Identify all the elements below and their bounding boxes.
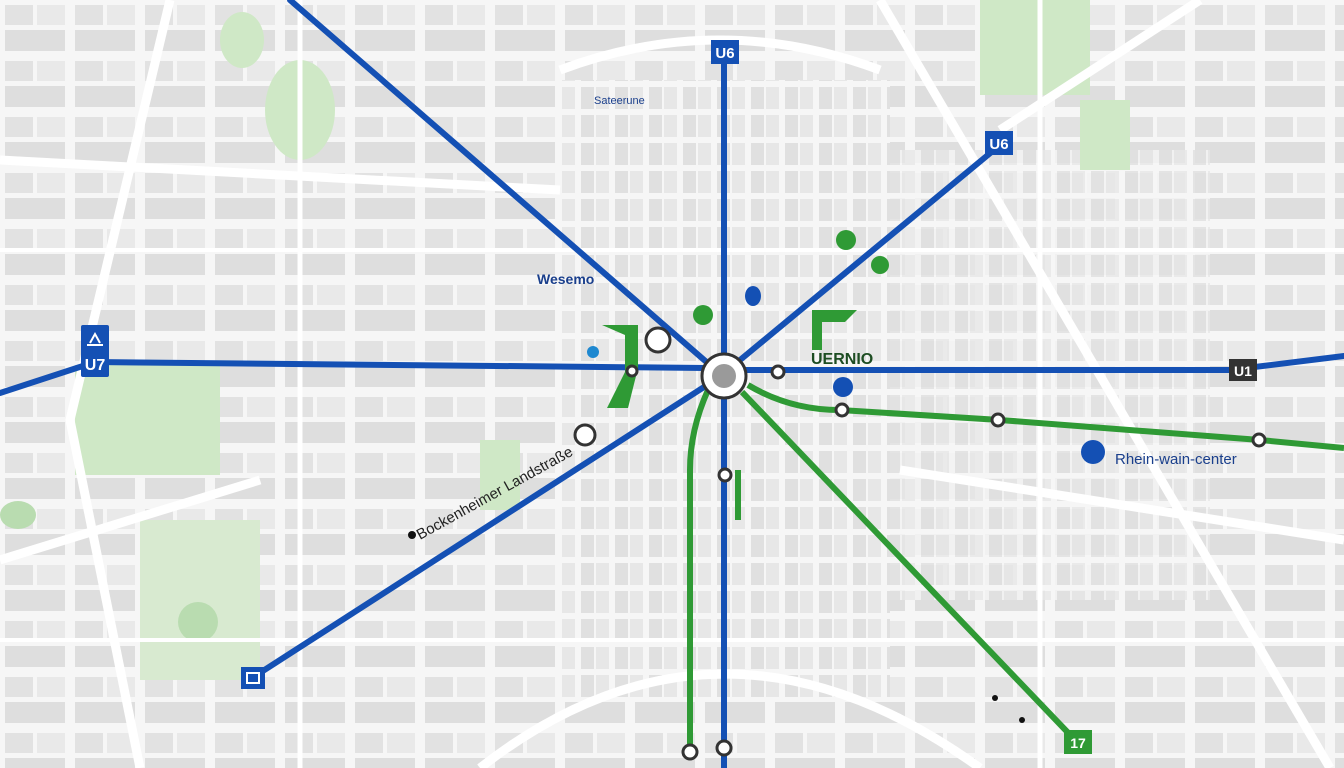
label: Wesemo: Wesemo	[537, 271, 594, 287]
icons	[408, 230, 1105, 723]
badge U6 top: U6	[715, 45, 735, 62]
badge U bottom-left	[241, 667, 265, 689]
green flags	[602, 310, 857, 408]
badge U1: U1	[1234, 363, 1252, 379]
label: Sateerune: Sateerune	[594, 95, 645, 107]
badge U6 top	[711, 40, 739, 64]
badge 17: 17	[1070, 735, 1086, 751]
badge U6 right: U6	[989, 136, 1009, 153]
parks	[0, 0, 1130, 680]
label: Rhein-main-center: Rhein-wain-center	[1115, 451, 1237, 468]
stations	[627, 366, 1265, 759]
badge U7	[81, 325, 109, 377]
label: UERNIO: UERNIO	[811, 351, 873, 368]
central hub	[702, 354, 746, 398]
label: Bockenheimer Landstraße: Bockenheimer Landstraße	[414, 443, 576, 543]
green lines	[690, 385, 1344, 752]
badge U7: U7	[85, 357, 105, 374]
badge 17	[1064, 730, 1092, 754]
badge U6 right	[985, 131, 1013, 155]
badge U1	[1229, 359, 1257, 381]
